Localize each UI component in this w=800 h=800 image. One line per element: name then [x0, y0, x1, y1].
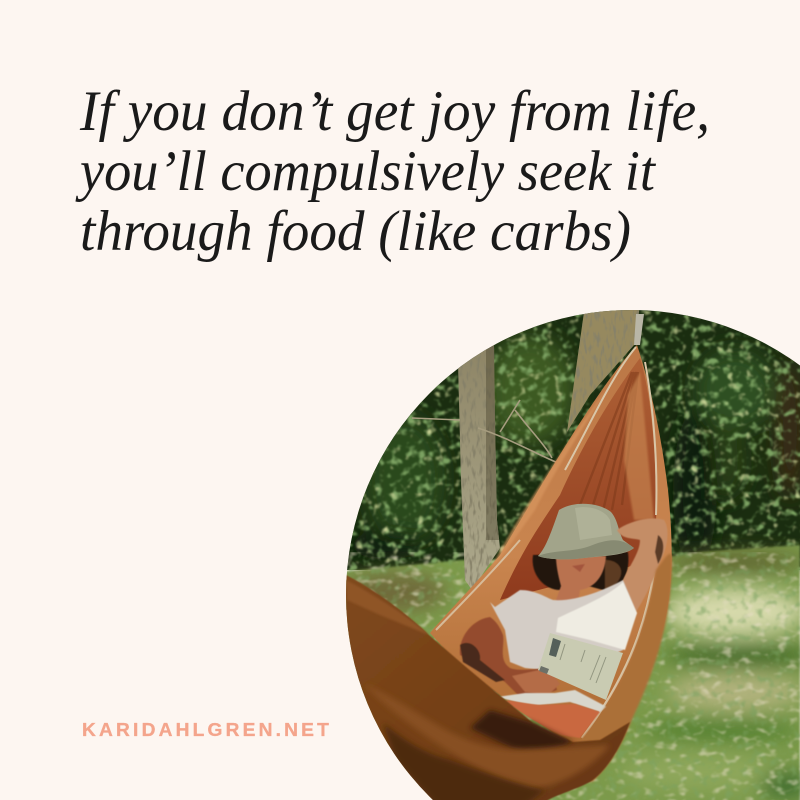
orange trousers: [503, 700, 600, 738]
white hem: [497, 690, 607, 712]
website credit: KARIDAHLGREN.NET: [82, 720, 332, 740]
title: you’ll compulsively seek it: [75, 140, 656, 203]
tree trunk: right: [567, 310, 640, 432]
lower shadow along the edge: [383, 723, 545, 800]
book: [538, 633, 623, 700]
forest backdrop: [340, 300, 800, 570]
bare branches: [412, 400, 556, 462]
bucket hat: [538, 504, 634, 559]
hammock piping: [436, 347, 656, 738]
hair: [533, 552, 628, 592]
upper fold highlight: [346, 580, 429, 635]
dark crease: [470, 710, 573, 750]
face and neck: [555, 556, 607, 600]
hammock strap: [634, 314, 644, 345]
tree trunk: left: [458, 345, 500, 588]
title: If you don’t get joy from life,: [79, 80, 710, 143]
white t-shirt: [490, 580, 637, 672]
title: through food (like carbs): [80, 200, 631, 263]
barcode: [549, 638, 561, 657]
hammock: front fold: [340, 575, 630, 800]
hammock: back shell: [430, 345, 672, 768]
raised arm: [617, 518, 667, 612]
shadowed inner fabric with pleats: [500, 358, 656, 600]
hammock: outer right edge: [581, 554, 673, 782]
sunlit band on the left of the shell: [492, 398, 602, 564]
grass meadow: [340, 545, 800, 800]
lower ridge: [374, 690, 608, 788]
photo: person resting in a hammock, circular crop: [340, 300, 800, 800]
resting arm with tattoo: [460, 617, 560, 696]
title: [75, 80, 710, 263]
